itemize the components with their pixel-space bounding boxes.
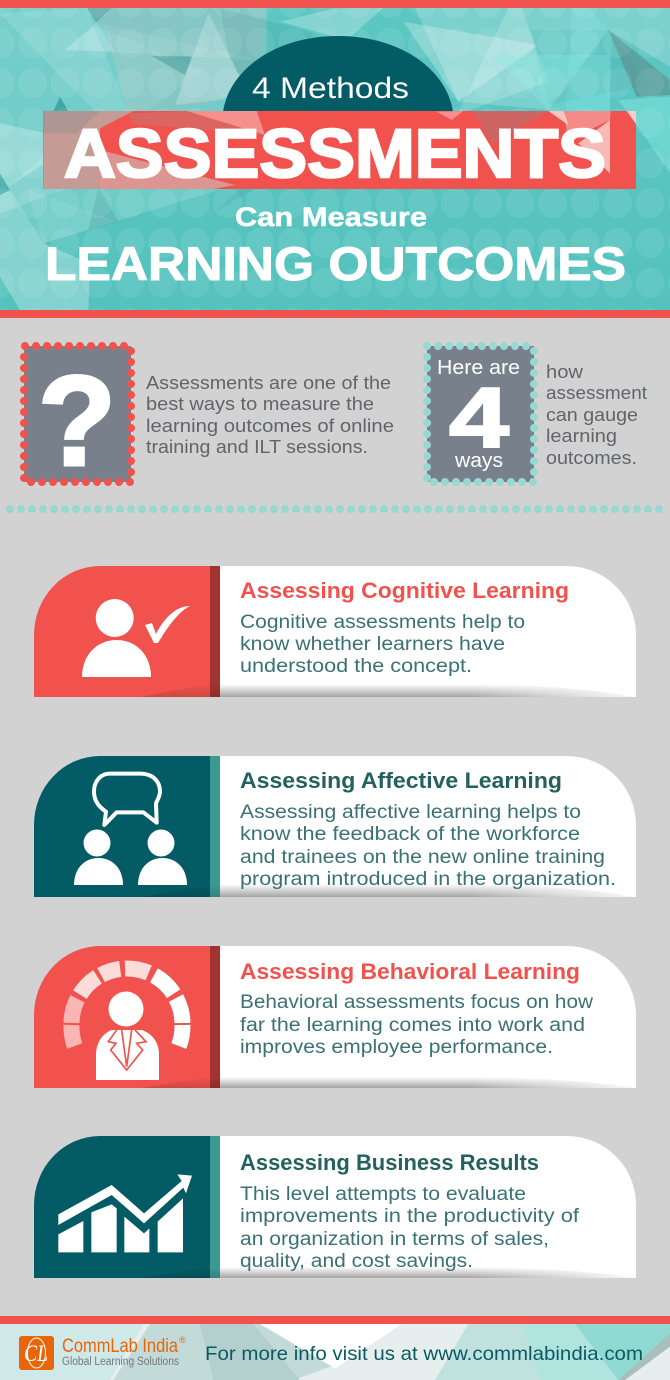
- question mark stamp: [24, 346, 134, 493]
- logo: CommLab India: CommLab India: [62, 1336, 178, 1357]
- heading: assessing business results: Assessing Business Results: [240, 1150, 539, 1175]
- intro text: best ways to measure the: [146, 393, 374, 414]
- panel: behavioral learning: [34, 946, 636, 1088]
- text: behavioral description: [240, 992, 593, 1058]
- footer background: [0, 1316, 670, 1380]
- text: behavioral description: Behavioral assessments focus on how: [240, 992, 593, 1013]
- intro text: learning outcomes of online: [146, 415, 394, 436]
- right intro text: [546, 361, 647, 468]
- text: cognitive description: Cognitive assessments help to: [240, 612, 525, 633]
- right intro text: assessment: [546, 382, 647, 403]
- heading: Assessments: ASSESSMENTS: [64, 115, 606, 192]
- icon: two people with speech bubble: [74, 774, 187, 885]
- footer link text: For more info visit us at www.commlabindia.com: [205, 1343, 643, 1365]
- heading: assessing affective learning: Assessing Affective Learning: [240, 768, 562, 793]
- logo: CommLab India: Global Learning Solutions: [62, 1356, 179, 1368]
- here are 4 ways stamp: 4: [449, 371, 509, 466]
- right intro text: outcomes.: [546, 447, 637, 468]
- text: affective description: Assessing affective learning helps to: [240, 802, 581, 823]
- icon: person with check mark: [82, 599, 190, 677]
- text: business description: quality, and cost savings.: [240, 1251, 473, 1272]
- text: business description: This level attempts to evaluate: [240, 1184, 526, 1205]
- icon: rising bar chart with arrow: [58, 1174, 192, 1252]
- here are 4 ways stamp: ways: [454, 450, 503, 472]
- text: cognitive description: know whether learners have: [240, 634, 505, 655]
- heading: assessing cognitive learning: Assessing Cognitive Learning: [240, 578, 569, 603]
- logo: CommLab India: ®: [179, 1335, 186, 1345]
- here are 4 ways stamp: [427, 346, 535, 482]
- text: cognitive description: [240, 612, 525, 677]
- text: affective description: know the feedback of the workforce: [240, 824, 580, 845]
- text: affective description: program introduced in the organization.: [240, 869, 616, 890]
- text: business description: an organization in terms of sales,: [240, 1229, 549, 1250]
- text: cognitive description: understood the concept.: [240, 656, 472, 677]
- text: affective description: [240, 802, 616, 890]
- right intro text: learning: [546, 425, 617, 446]
- panel: cognitive learning: [34, 566, 636, 697]
- title banner: [43, 111, 636, 189]
- text: affective description: and trainees on the new online training: [240, 847, 605, 868]
- intro text: training and ILT sessions.: [146, 436, 368, 457]
- text: behavioral description: improves employee performance.: [240, 1037, 553, 1058]
- heading: assessing behavioral learning: Assessing Behavioral Learning: [240, 959, 580, 984]
- text: behavioral description: far the learning comes into work and: [240, 1015, 585, 1036]
- logo: CommLab India: [19, 1335, 186, 1370]
- top and bottom header stripes: [0, 0, 670, 318]
- text: business description: [240, 1184, 580, 1272]
- title semicircle: [223, 36, 453, 112]
- panel: affective learning: [34, 756, 636, 897]
- header banner: [0, 8, 670, 310]
- icon: person in suit with gauge: [71, 968, 183, 1080]
- heading: Can Measure: Can Measure: [235, 202, 427, 232]
- logo: CommLab India: CL: [24, 1341, 48, 1366]
- heading: 4 Methods: 4 Methods: [252, 72, 409, 105]
- heading: Learning Outcomes: LEARNING OUTCOMES: [45, 237, 626, 290]
- question mark stamp: ?: [38, 350, 116, 493]
- intro text: [146, 372, 394, 457]
- text: business description: improvements in the productivity of: [240, 1206, 580, 1227]
- panel: business results: [34, 1136, 636, 1278]
- intro text: Assessments are one of the: [146, 372, 391, 393]
- right intro text: can gauge: [546, 404, 638, 425]
- right intro text: how: [546, 361, 584, 382]
- here are 4 ways stamp: Here are: [437, 357, 520, 379]
